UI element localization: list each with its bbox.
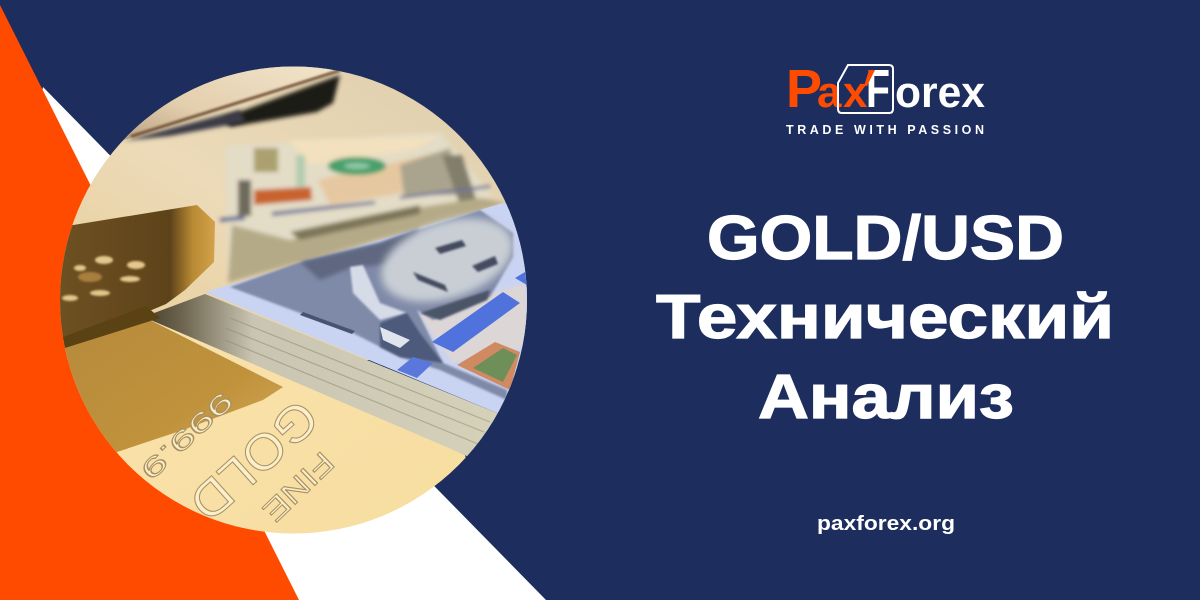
title: GOLD/USD: [707, 204, 1064, 273]
website: paxforex.org: [817, 513, 955, 535]
engraved text: FINE: [256, 445, 340, 528]
title: Технический: [656, 283, 1114, 352]
logo wordmark: orex: orex: [895, 68, 986, 117]
tagline: TRADE WITH PASSION: [786, 123, 984, 137]
banknote stack edge: [152, 294, 498, 456]
face: [377, 214, 514, 306]
logo: [786, 59, 986, 137]
title: [656, 204, 1114, 432]
orange diagonal shape: [0, 5, 299, 600]
gold bar with bill reflection: [55, 50, 535, 360]
engraving: [230, 210, 513, 400]
logo wordmark: Pax: P: [786, 59, 822, 119]
logo frame: [838, 65, 893, 113]
lower gold bar: [63, 306, 466, 534]
photo: gold bars and dollar bills: [60, 66, 527, 534]
logo wordmark: Pax: a: [817, 68, 842, 117]
logo wordmark: F: F: [866, 59, 890, 119]
bill tint: [417, 283, 527, 363]
dollar bill with portrait: [205, 203, 527, 414]
logo accent: [864, 70, 875, 86]
title: Анализ: [758, 363, 1014, 432]
white diagonal shape: [0, 87, 546, 600]
logo wordmark: Pax: x: [843, 68, 868, 117]
dark gold bar: [55, 205, 215, 342]
engraved text: 999.9: [135, 386, 239, 486]
engraved text: GOLD: [179, 389, 329, 532]
